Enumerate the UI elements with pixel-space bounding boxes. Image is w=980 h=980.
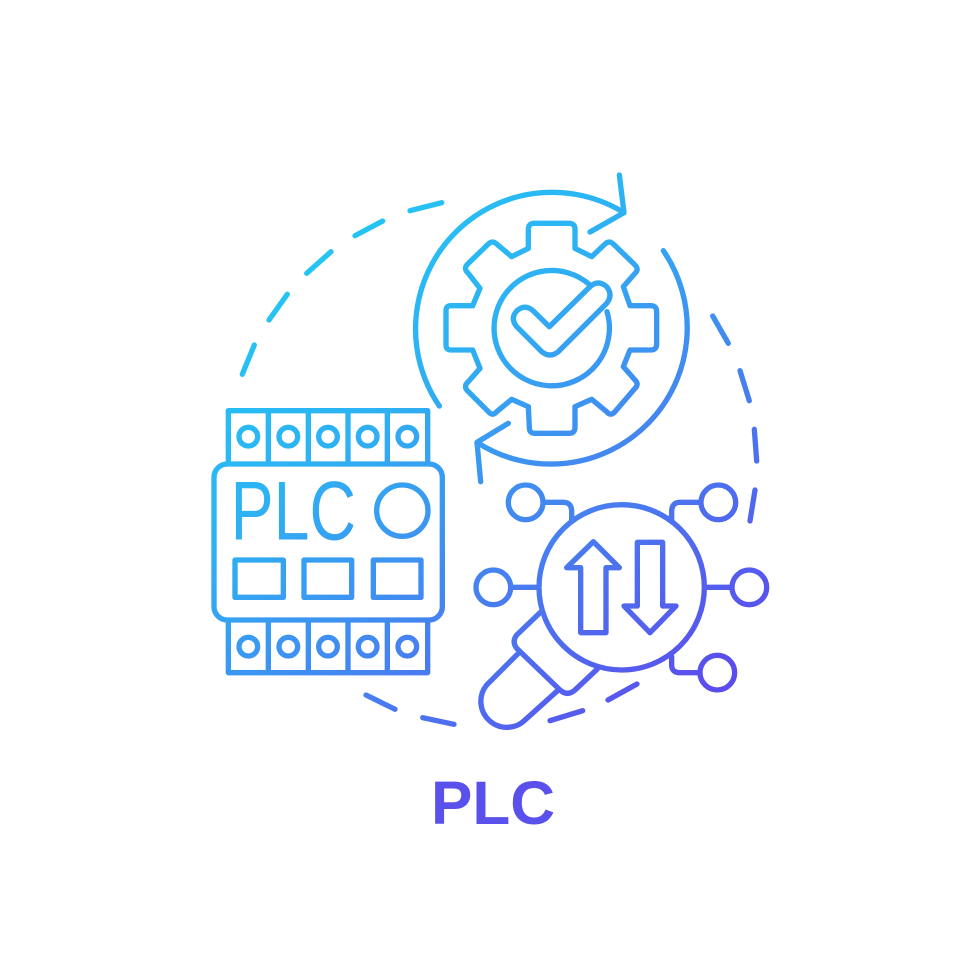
bottom terminal block: [228, 620, 428, 673]
arrow: upper rotation arc: [416, 175, 624, 406]
module label: PLC: [231, 465, 356, 558]
arrow: lower rotation arc: [477, 251, 687, 482]
top terminal block: [228, 411, 428, 464]
title: PLC: [431, 769, 555, 837]
icon: PLC module: [214, 411, 442, 673]
arrow: down: [624, 542, 676, 633]
network nodes and connectors: [476, 485, 767, 690]
icon: magnifier with data arrows and nodes: [476, 485, 767, 727]
icon: circle behind check: [494, 270, 609, 386]
dashed outer ring: [242, 203, 757, 724]
magnifier lens: [539, 505, 704, 670]
module body: [214, 464, 442, 620]
control buttons: [235, 560, 421, 597]
icon: check mark: [513, 283, 610, 355]
status indicator: [377, 485, 428, 536]
arrow: up: [567, 542, 619, 633]
icon: gear: [446, 223, 657, 433]
icon: gear with check mark and rotating arrows: [416, 175, 687, 482]
magnifier handle: [481, 613, 597, 727]
